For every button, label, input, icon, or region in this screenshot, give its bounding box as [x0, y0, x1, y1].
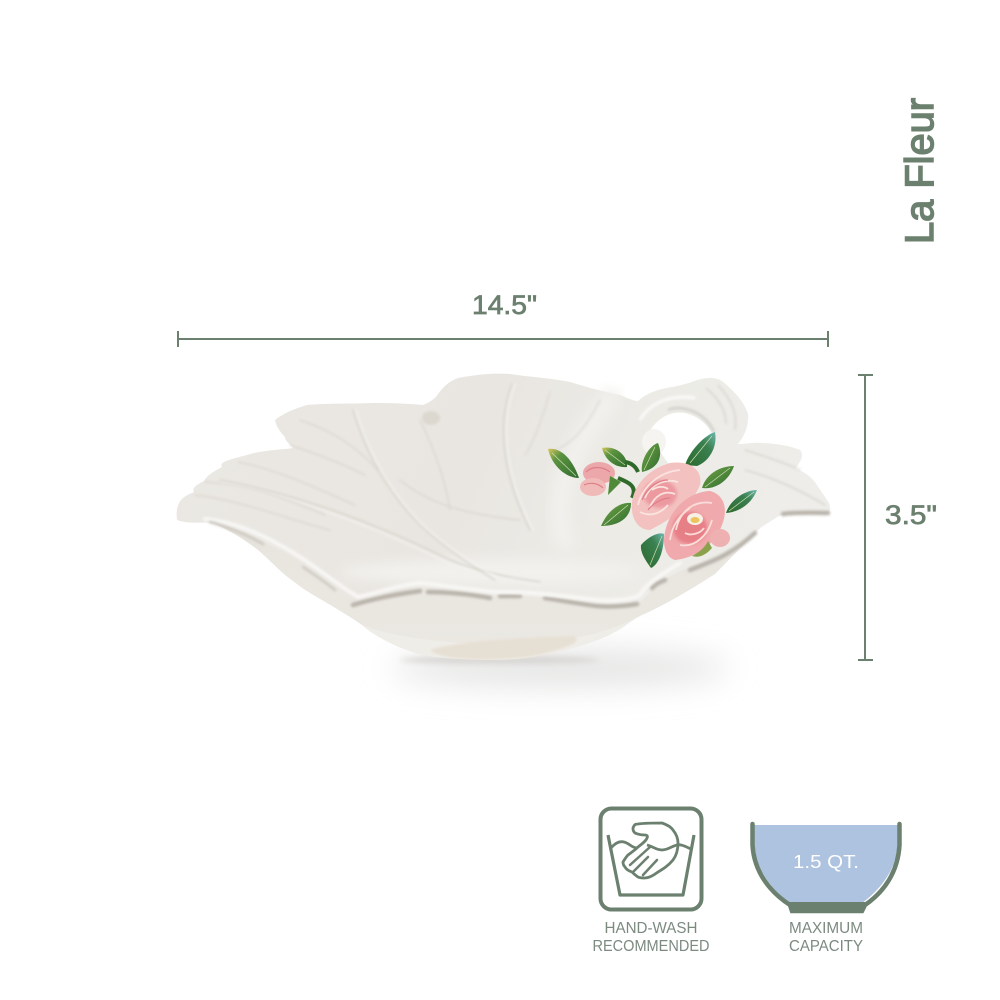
icon: bowl capacity [752, 824, 900, 911]
water waves [611, 842, 691, 850]
water fill [754, 825, 898, 903]
small bud [710, 529, 730, 547]
rose decoration [548, 432, 757, 568]
width dimension: 14.5 inches [178, 290, 828, 347]
bowl outline [752, 824, 900, 911]
title: La Fleur: La Fleur [898, 98, 942, 244]
handle hole [651, 413, 712, 472]
height dimension: 3.5 inches: 3.5" [885, 500, 937, 530]
leaf under stem [601, 503, 631, 526]
leaf bottom [641, 533, 664, 568]
large rose [632, 462, 700, 530]
leaf yellow tip [702, 466, 734, 488]
label: maximum capacity [789, 920, 863, 955]
label: maximum capacity: CAPACITY [789, 938, 863, 955]
leaf far left [548, 449, 579, 478]
rose bud [580, 462, 621, 496]
second rose [664, 491, 725, 560]
label: maximum capacity: MAXIMUM [789, 920, 863, 937]
leaves [548, 432, 757, 568]
label: hand-wash recommended [592, 920, 710, 955]
wash tub [608, 835, 694, 895]
icon: hand-wash recommended [600, 808, 702, 910]
stems [618, 462, 638, 498]
bowl underside [210, 500, 760, 660]
label: hand-wash recommended: HAND-WASH [604, 920, 698, 937]
interior shading and veins [195, 384, 825, 585]
leaf at ball [642, 443, 660, 472]
hands [623, 823, 678, 878]
capacity value: 1.5 QT. [793, 852, 859, 872]
leaf at handle [685, 432, 716, 466]
height dimension: 3.5 inches [858, 375, 937, 660]
leaf right [726, 490, 757, 513]
label: hand-wash recommended: RECOMMENDED [592, 938, 710, 955]
bowl shadow [390, 650, 730, 686]
scalloped rim [205, 513, 828, 606]
bowl foot [362, 617, 637, 660]
hand-wash box [600, 808, 702, 910]
leaf-shaped bowl [177, 374, 830, 686]
width dimension: 14.5 inches: 14.5" [472, 290, 537, 320]
leaf top [602, 447, 627, 467]
leaf rim and surface [177, 374, 830, 606]
unglazed foot patch [430, 636, 577, 659]
